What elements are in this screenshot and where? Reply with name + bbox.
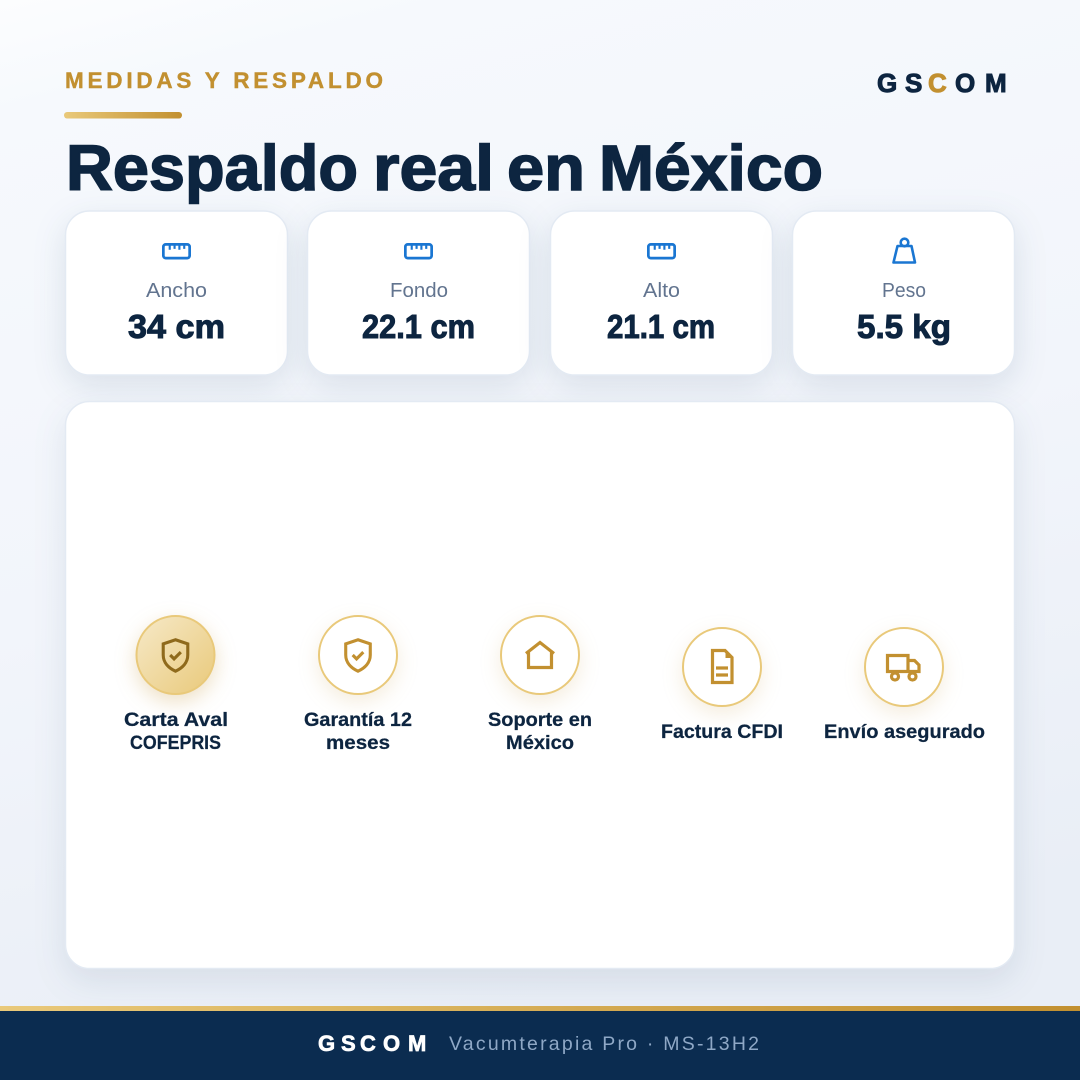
GSCOM logo: C — [928, 68, 947, 98]
item: envio — [824, 628, 985, 743]
eyebrow heading: MEDIDAS Y RESPALDO — [65, 68, 383, 93]
title: real — [373, 132, 494, 204]
panel: ancho: Ancho — [146, 280, 207, 302]
GSCOM logo: GS — [877, 68, 922, 98]
footer product line: Vacumterapia Pro · MS-13H2 — [449, 1033, 759, 1055]
title: México — [599, 132, 823, 204]
item: envio: Envío asegurado — [824, 721, 985, 743]
item: factura: Factura CFDI — [661, 721, 783, 743]
panel: ancho — [66, 211, 288, 375]
title — [66, 132, 823, 204]
item: carta aval: Carta Aval — [124, 709, 228, 731]
item: carta aval: COFEPRIS — [130, 732, 221, 754]
item: garantia: Garantía 12 — [304, 709, 412, 731]
footer — [0, 1006, 1080, 1080]
panel: ancho: 34 cm — [128, 308, 225, 345]
panel: peso: Peso — [882, 280, 926, 302]
footer brand: GSCOM — [318, 1031, 426, 1056]
icon: ruler — [405, 244, 432, 258]
panel: guarantees — [66, 402, 1014, 968]
icon: ruler — [648, 244, 675, 258]
icon: shield — [163, 640, 188, 671]
panel: fondo: Fondo — [390, 280, 448, 302]
icon: weight — [894, 239, 915, 262]
item: soporte: México — [506, 732, 574, 754]
title: en — [507, 132, 585, 204]
GSCOM logo: OM — [955, 68, 1007, 98]
panel: alto — [550, 211, 772, 375]
gold accent bar — [64, 112, 182, 118]
panel: alto: 21.1 cm — [607, 308, 715, 345]
icon: document — [712, 650, 732, 682]
icon: ruler — [163, 244, 190, 258]
item: soporte — [488, 616, 592, 754]
icon: house — [526, 642, 554, 668]
item: carta aval — [124, 616, 228, 754]
icon: shield — [346, 640, 370, 671]
item: garantia — [304, 616, 412, 754]
item: factura — [661, 628, 783, 743]
icon: truck — [888, 656, 919, 680]
panel: peso: 5.5 kg — [857, 308, 951, 345]
title: Respaldo — [66, 132, 358, 204]
panel: peso — [792, 211, 1014, 375]
panel: alto: Alto — [643, 280, 680, 302]
item: garantia: meses — [326, 732, 390, 754]
panel: fondo: 22.1 cm — [362, 308, 475, 345]
panel: fondo — [308, 211, 530, 375]
item: soporte: Soporte en — [488, 709, 592, 731]
